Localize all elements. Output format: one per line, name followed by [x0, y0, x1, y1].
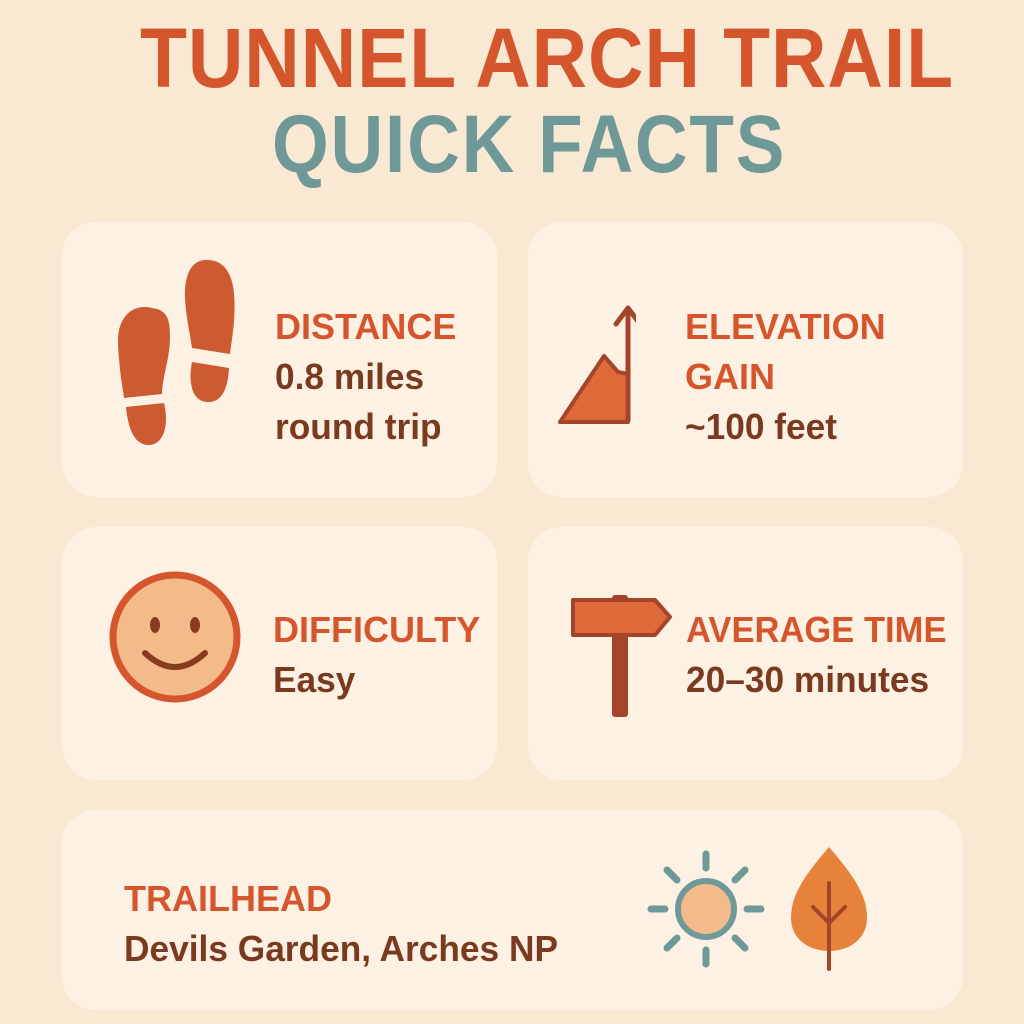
subtitle: QUICK FACTS — [272, 99, 786, 190]
text: average time: AVERAGE TIME — [686, 609, 947, 650]
text: trailhead: TRAILHEAD — [124, 878, 332, 919]
icon: sun — [648, 850, 764, 968]
icon: smiley — [110, 572, 240, 702]
icon: signpost — [571, 595, 672, 717]
panel: average time: 20–30 minutes — [686, 659, 929, 700]
text: elevation: ELEVATION — [685, 306, 886, 347]
panel: distance: round trip — [275, 406, 442, 447]
panel: elevation — [528, 222, 963, 497]
panel: distance: 0.8 miles — [275, 356, 424, 397]
title: TUNNEL ARCH TRAIL — [140, 11, 954, 105]
panel: difficulty — [62, 527, 497, 780]
text: distance: DISTANCE — [275, 306, 456, 347]
panel: average time — [528, 527, 963, 780]
icon: mountain arrow — [558, 306, 636, 424]
text: elevation — [685, 306, 886, 397]
panel: distance — [62, 222, 497, 497]
panel: trailhead: Devils Garden, Arches NP — [124, 928, 558, 969]
panel: trailhead — [62, 810, 963, 1010]
panel: elevation: ~100 feet — [685, 406, 837, 447]
text: difficulty: DIFFICULTY — [273, 609, 480, 650]
icon: footprints — [118, 260, 235, 445]
text: elevation: GAIN — [685, 356, 775, 397]
icon: leaf — [791, 847, 867, 971]
panel: difficulty: Easy — [273, 659, 355, 700]
